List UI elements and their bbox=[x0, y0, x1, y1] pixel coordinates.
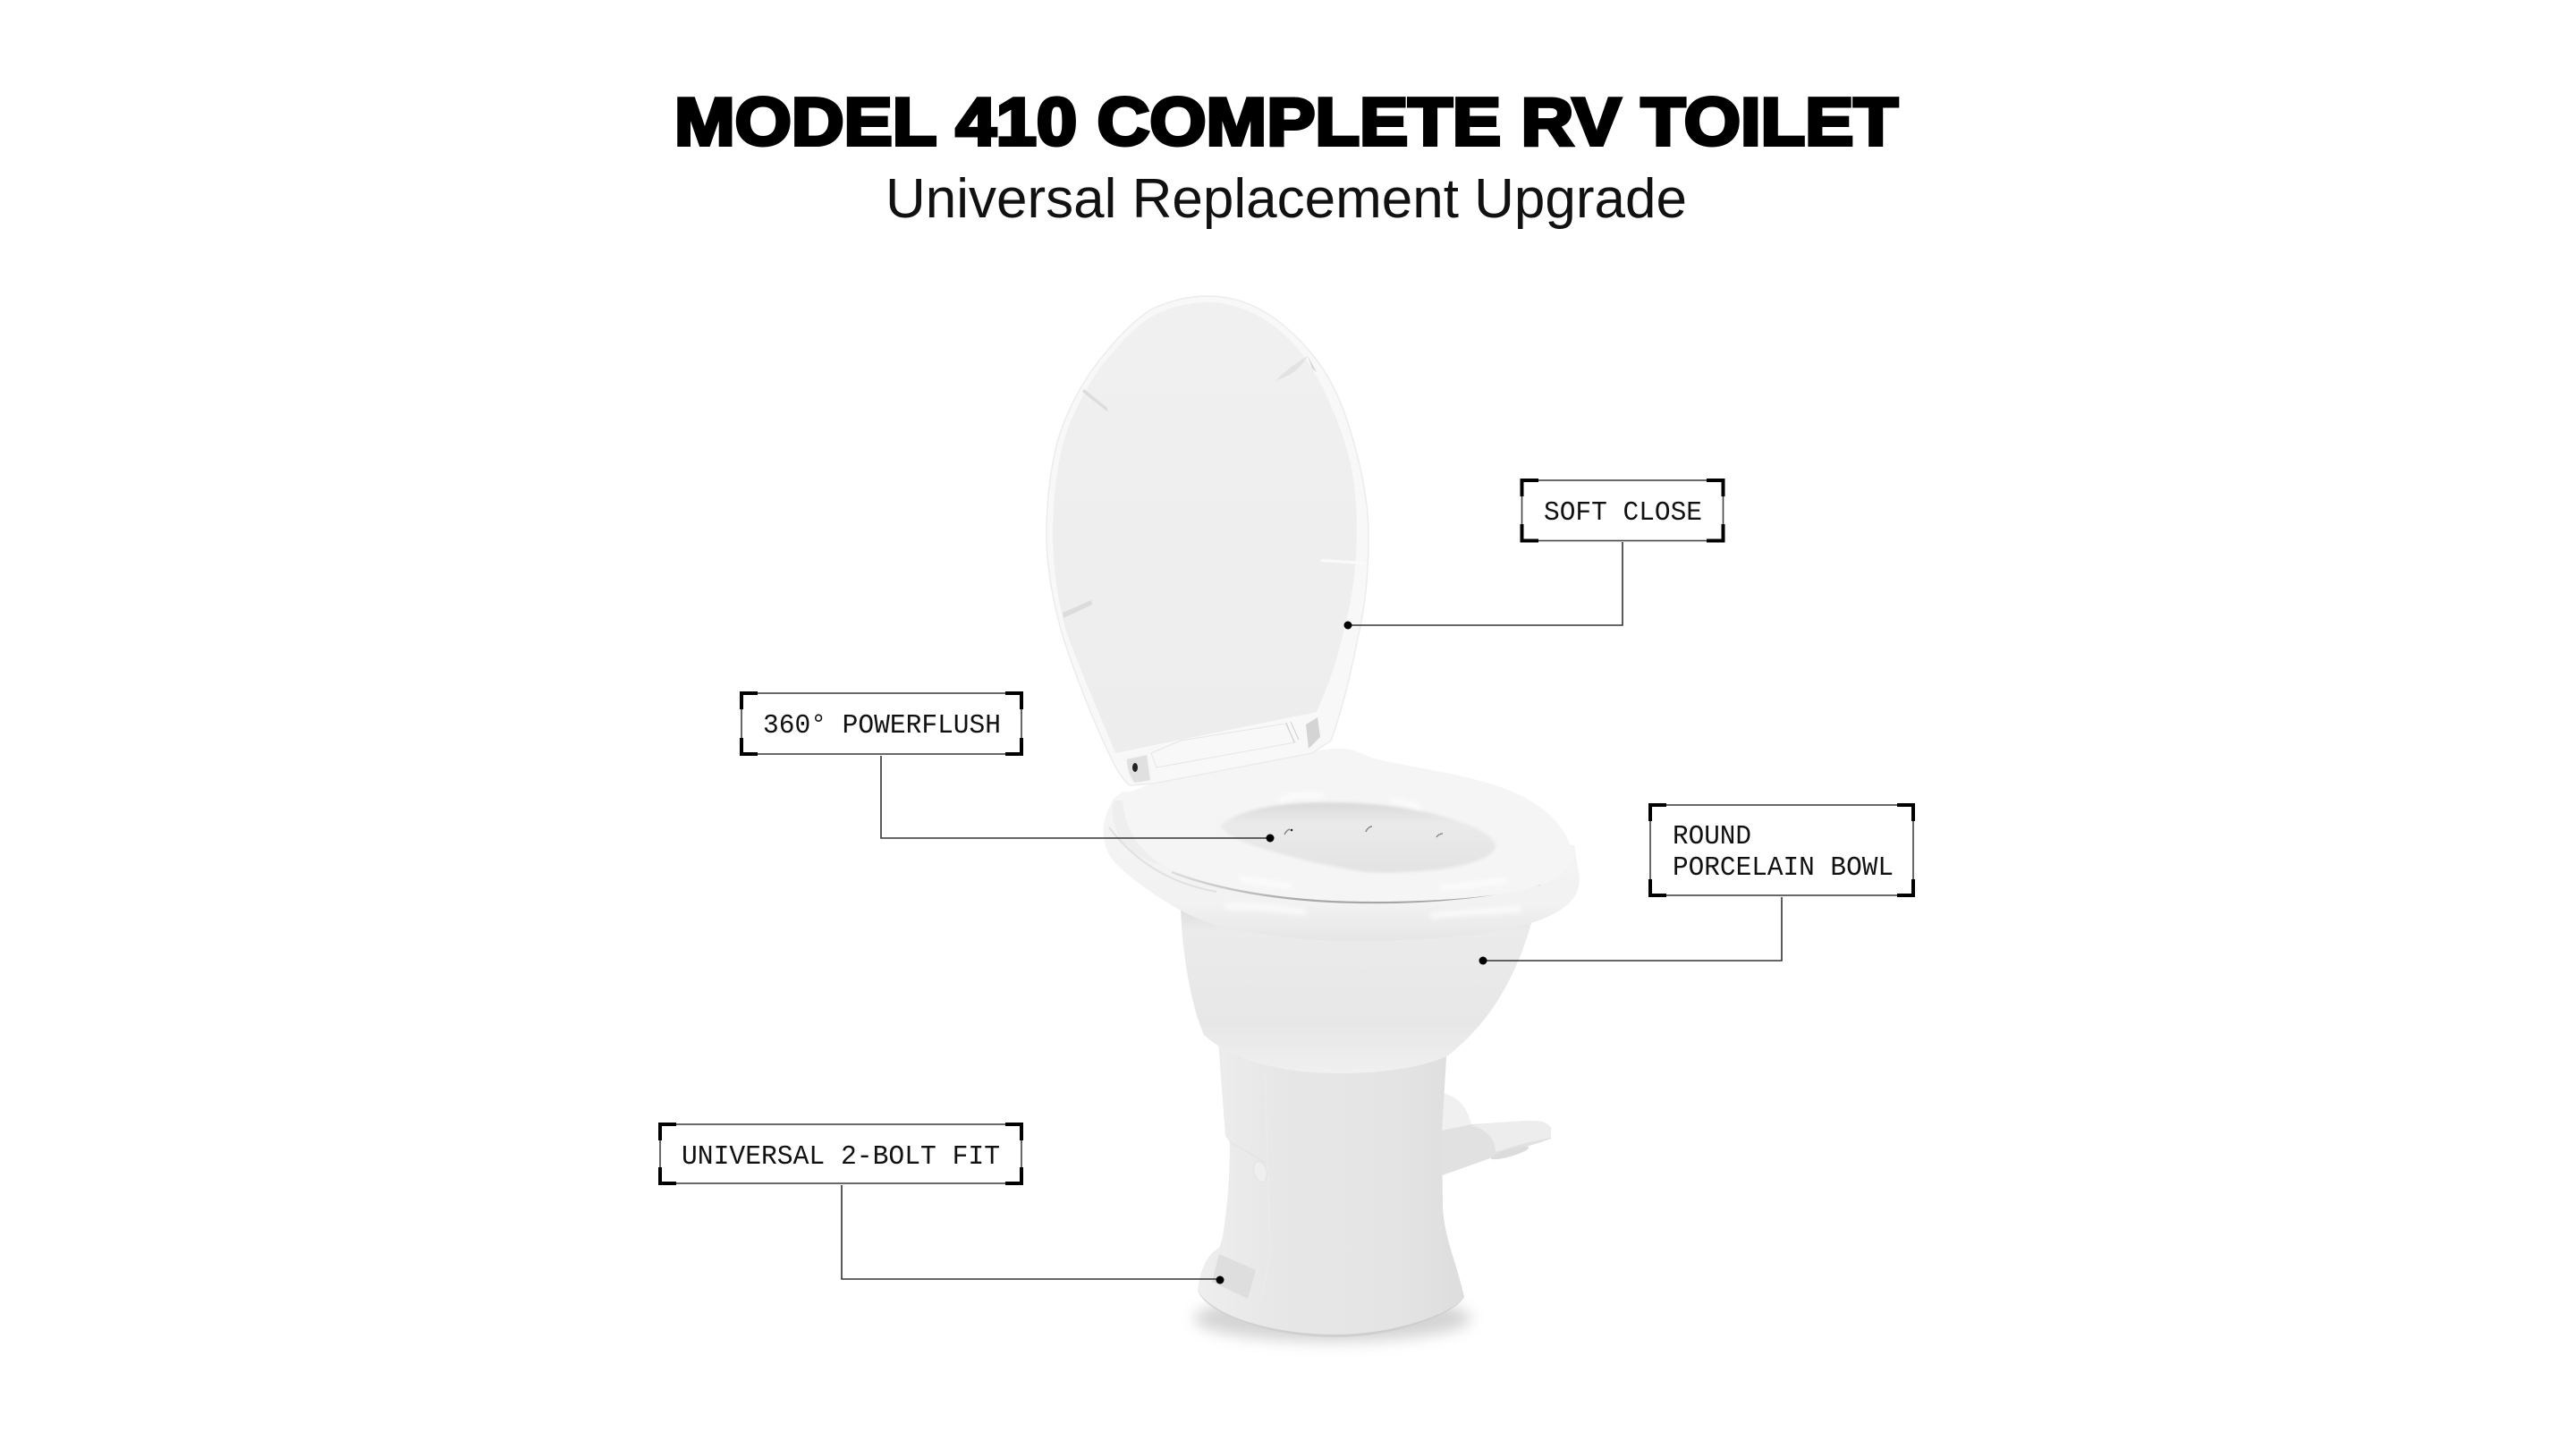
subtitle: Universal Replacement Upgrade bbox=[886, 168, 1687, 230]
callout: round porcelain bowl bbox=[1479, 805, 1913, 964]
mounting bolt cover bbox=[1212, 1254, 1256, 1299]
callout: 360 degree powerflush bbox=[741, 693, 1274, 843]
callout: soft close bbox=[1343, 480, 1723, 630]
floor shadow bbox=[1194, 1295, 1471, 1342]
callout: 360 degree powerflush: 360° POWERFLUSH bbox=[763, 710, 1001, 741]
callout: round porcelain bowl: PORCELAIN BOWL bbox=[1673, 852, 1894, 884]
pedestal bbox=[1198, 1042, 1464, 1337]
lid inner panel bbox=[1053, 302, 1357, 753]
raised lid bbox=[1046, 296, 1368, 785]
toilet seat bbox=[1113, 749, 1574, 902]
bowl opening with flush jets bbox=[1220, 802, 1496, 873]
title: MODEL 410 COMPLETE RV TOILET bbox=[674, 84, 1898, 159]
callout: soft close: SOFT CLOSE bbox=[1544, 497, 1702, 529]
hinge assembly bbox=[1126, 717, 1320, 784]
bowl rim bbox=[1104, 792, 1580, 941]
lid bumpers bbox=[1063, 356, 1364, 618]
callout: round porcelain bowl: ROUND bbox=[1673, 821, 1751, 852]
bowl bbox=[1181, 908, 1533, 1073]
callout: universal 2-bolt fit bbox=[660, 1124, 1224, 1284]
callout: universal 2-bolt fit: UNIVERSAL 2-BOLT FIT bbox=[682, 1141, 1000, 1173]
toilet illustration bbox=[1046, 296, 1580, 1342]
flush pedal bbox=[1442, 1093, 1551, 1175]
